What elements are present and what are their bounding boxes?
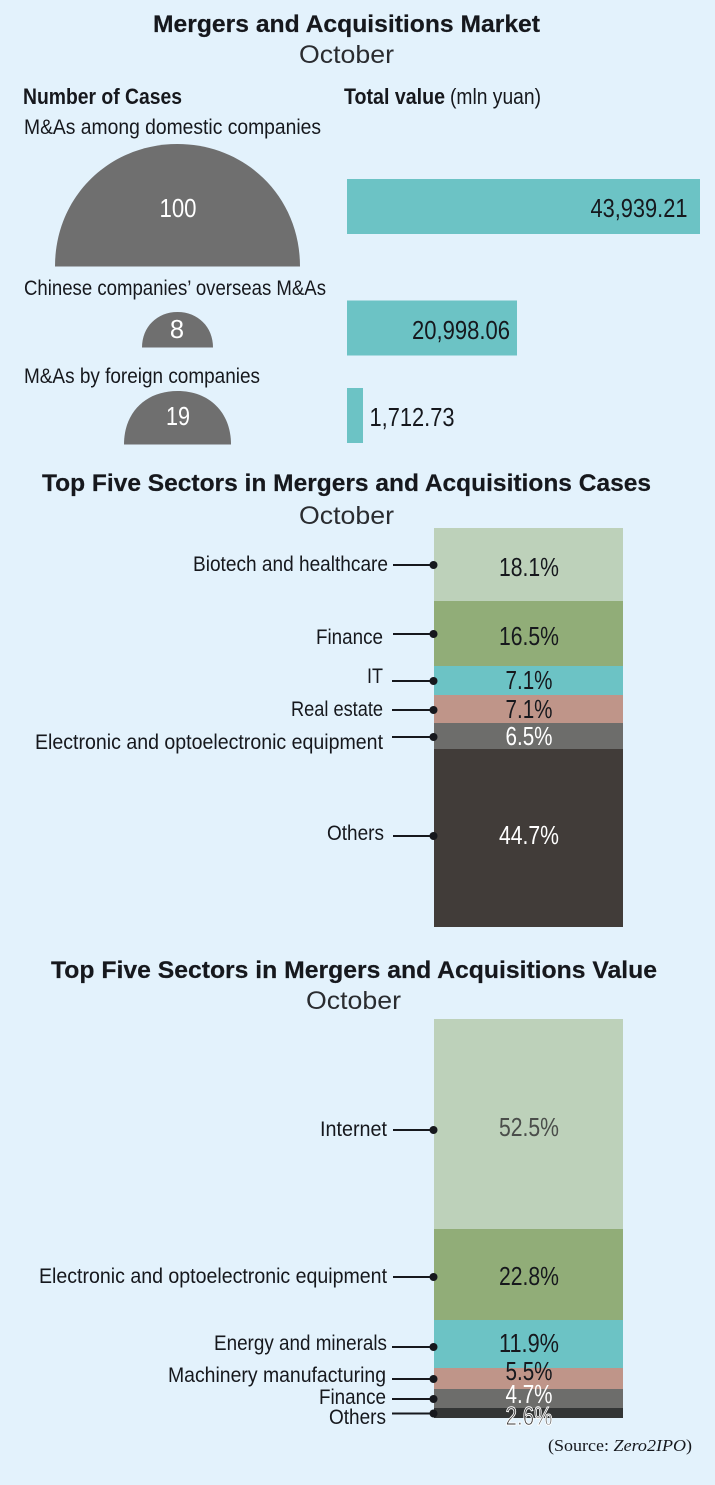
segment: biotech and healthcare: 18.1% bbox=[499, 554, 559, 582]
panel: sectors by value bbox=[39, 957, 657, 1431]
subtitle: cases month: October bbox=[299, 502, 394, 530]
stacked bar: value bbox=[434, 1019, 623, 1431]
segment: machinery manufacturing bbox=[434, 1358, 623, 1389]
segment: others bbox=[434, 749, 623, 927]
callout: energy and minerals: Energy and minerals bbox=[214, 1332, 387, 1355]
title: cases: Top Five Sectors in Mergers and Acquisitions Cases bbox=[42, 470, 651, 497]
semicircle: domestic 100: 100 bbox=[160, 195, 196, 223]
segment: others: 2.6% bbox=[506, 1403, 552, 1431]
segment: machinery manufacturing: 5.5% bbox=[506, 1358, 552, 1386]
semicircle: foreign 19 bbox=[124, 391, 231, 444]
callout: finance bbox=[319, 1386, 438, 1409]
callout: others bbox=[329, 1406, 438, 1429]
callout: IT: IT bbox=[367, 665, 383, 688]
subtitle: market month: October bbox=[299, 41, 394, 69]
label: foreign: M&As by foreign companies bbox=[24, 365, 260, 388]
segment: biotech and healthcare bbox=[434, 528, 623, 601]
bar: overseas value: 20,998.06 bbox=[412, 317, 510, 345]
callout: internet bbox=[320, 1118, 438, 1141]
callout: finance: Finance bbox=[319, 1386, 386, 1409]
source note: (Source: Zero2IPO ) bbox=[548, 1436, 692, 1455]
callout: real estate: Real estate bbox=[291, 698, 383, 721]
callout: finance: Finance bbox=[316, 626, 383, 649]
callout: electronic equipment: Electronic and optoelectronic equipment bbox=[35, 731, 383, 754]
segment: internet: 52.5% bbox=[499, 1114, 559, 1142]
semicircle: overseas 8 bbox=[142, 312, 213, 348]
semicircle: overseas 8: 8 bbox=[170, 316, 184, 344]
callout: others: Others bbox=[327, 822, 384, 845]
segment: real estate: 7.1% bbox=[506, 696, 552, 724]
callout: others: Others bbox=[329, 1406, 386, 1429]
bar: domestic value bbox=[347, 179, 700, 234]
segment: real estate bbox=[434, 695, 623, 724]
subtitle: value month: October bbox=[306, 987, 401, 1015]
segment: internet bbox=[434, 1019, 623, 1229]
segment: finance: 16.5% bbox=[499, 623, 559, 651]
column heading: cases: Number of Cases bbox=[23, 84, 182, 109]
bar: domestic value: 43,939.21 bbox=[590, 195, 688, 223]
segment: electronic equipment: 6.5% bbox=[506, 723, 552, 751]
segment: finance: 4.7% bbox=[506, 1381, 552, 1409]
bar: overseas value bbox=[347, 300, 517, 356]
column heading: value: Total value bbox=[344, 84, 445, 109]
panel: sectors by cases bbox=[35, 470, 651, 927]
segment: energy and minerals: 11.9% bbox=[499, 1330, 559, 1358]
callout: others bbox=[327, 822, 438, 845]
segment: finance bbox=[434, 1381, 623, 1409]
segment: electronic equipment bbox=[434, 1229, 623, 1320]
callout: finance bbox=[316, 626, 438, 649]
segment: energy and minerals bbox=[434, 1320, 623, 1368]
segment: others bbox=[434, 1403, 623, 1431]
label: overseas: Chinese companies’ overseas M&As bbox=[24, 277, 326, 300]
panel: market overview bbox=[23, 11, 700, 444]
segment: electronic equipment bbox=[434, 723, 623, 751]
column heading: value: (mln yuan) bbox=[450, 84, 541, 109]
bar: foreign value bbox=[347, 388, 454, 443]
bar: foreign value: 1,712.73 bbox=[370, 404, 454, 432]
semicircle: domestic 100 bbox=[55, 144, 300, 266]
callout: electronic equipment: Electronic and optoelectronic equipment bbox=[39, 1265, 387, 1288]
callout: machinery manufacturing: Machinery manufacturing bbox=[168, 1364, 386, 1387]
label: domestic: M&As among domestic companies bbox=[24, 116, 321, 139]
callout: IT bbox=[367, 665, 438, 688]
callout: internet: Internet bbox=[320, 1118, 387, 1141]
segment: others: 44.7% bbox=[499, 822, 559, 850]
segment: IT bbox=[434, 666, 623, 695]
semicircle: foreign 19: 19 bbox=[166, 403, 190, 431]
stacked bar: cases bbox=[434, 528, 623, 927]
title: market: Mergers and Acquisitions Market bbox=[153, 11, 540, 38]
segment: finance bbox=[434, 601, 623, 666]
title: value: Top Five Sectors in Mergers and Acquisitions Value bbox=[51, 957, 657, 984]
callout: biotech and healthcare: Biotech and healthcare bbox=[193, 553, 388, 576]
segment: IT: 7.1% bbox=[506, 667, 552, 695]
segment: electronic equipment: 22.8% bbox=[499, 1263, 559, 1291]
